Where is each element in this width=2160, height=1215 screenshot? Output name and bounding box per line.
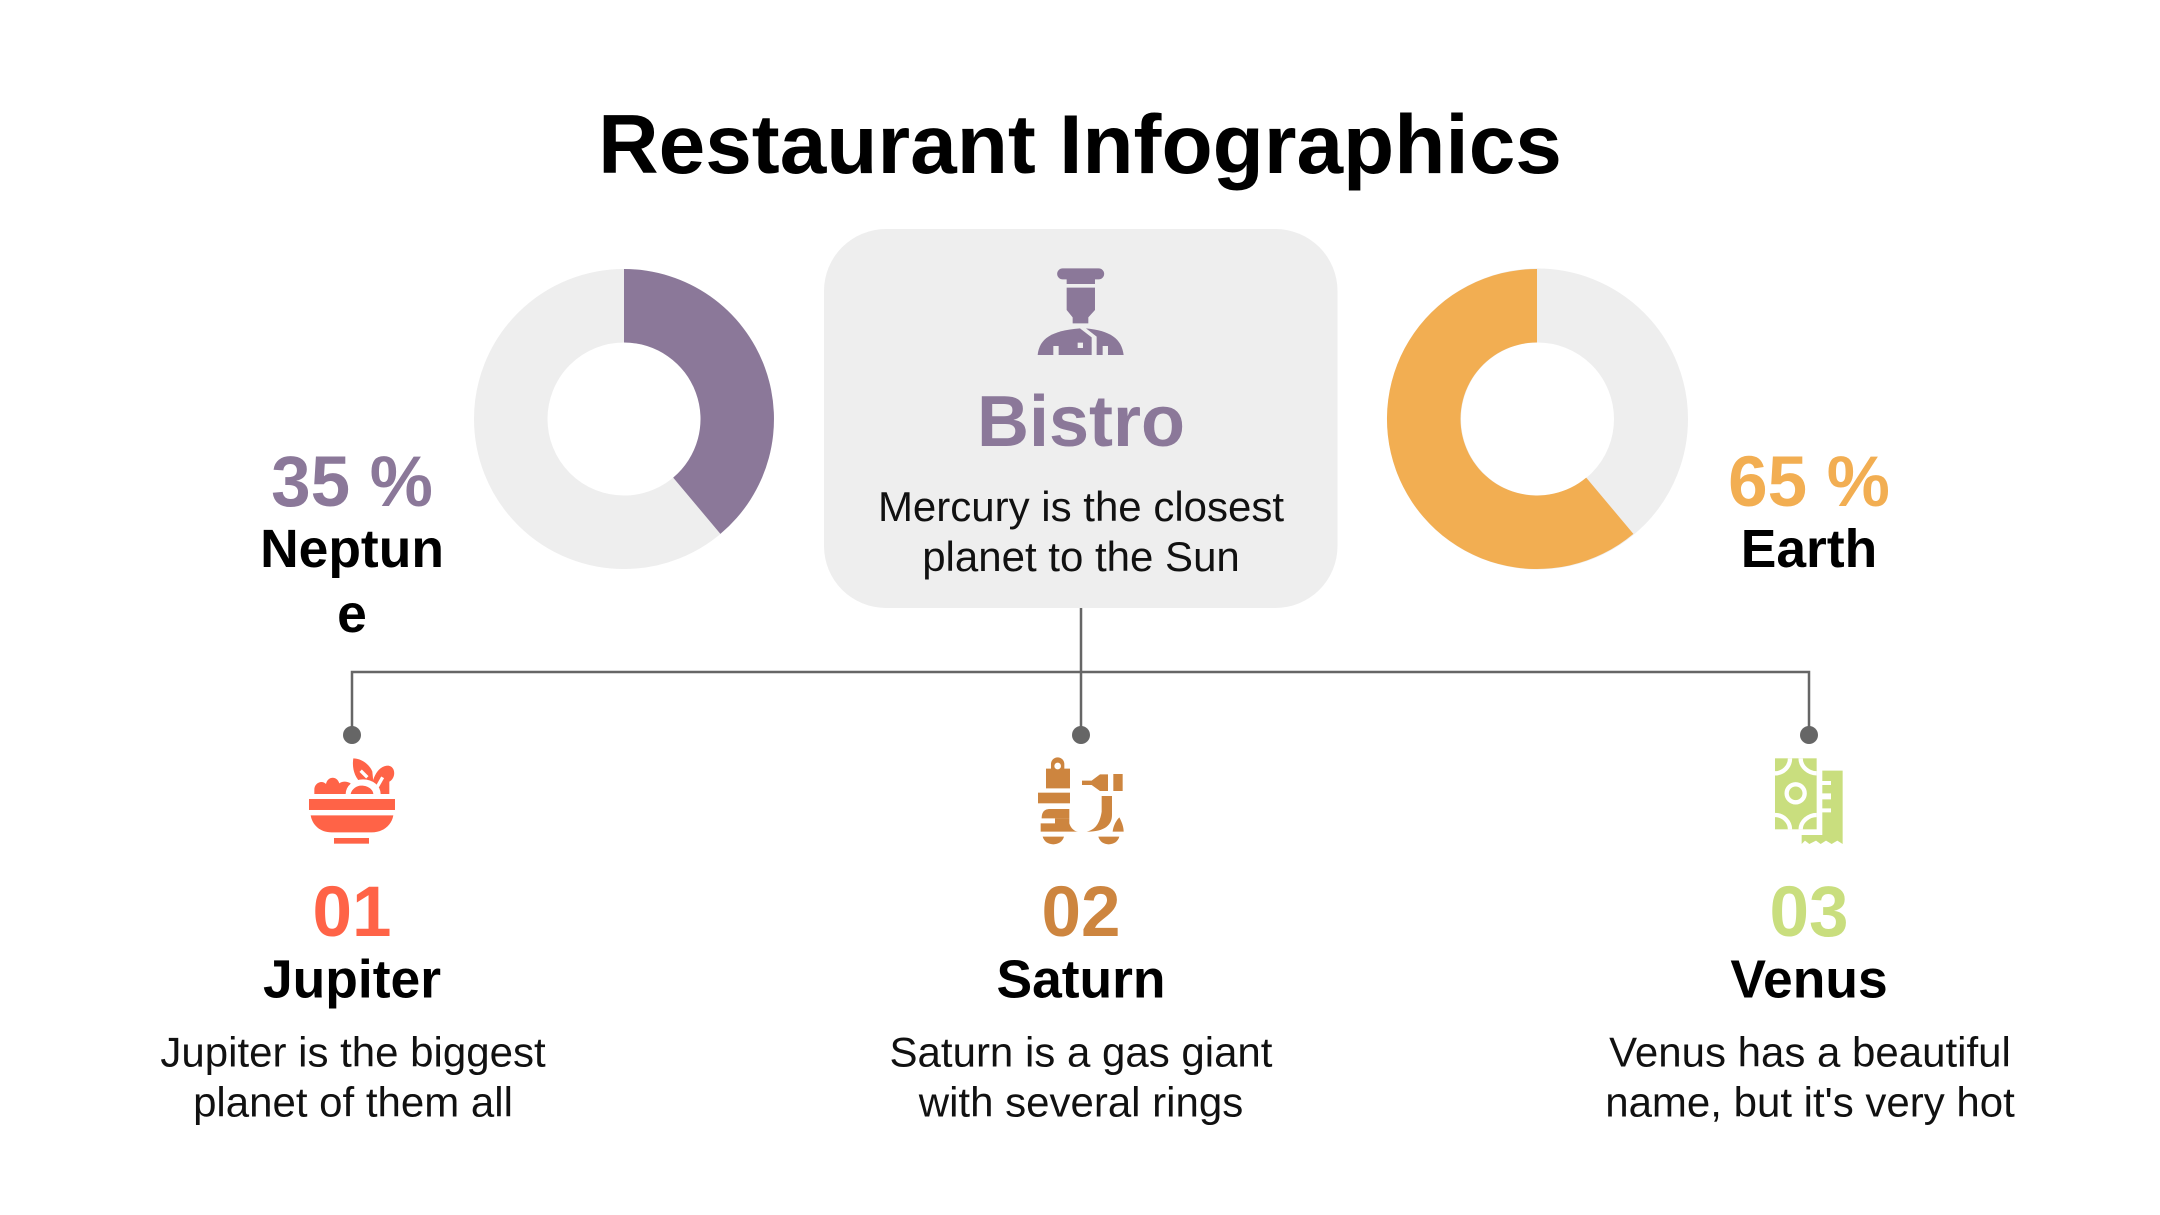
donut chart: Earth 65% [1387,269,1651,569]
stat: Neptune: e [337,585,367,644]
item: Venus [1605,758,2015,1126]
panel: Bistro: planet to the Sun [922,533,1240,580]
number: 03: 03 [1770,873,1848,952]
stat: Neptune: 35 % [271,443,433,522]
item: Saturn: with several rings [918,1078,1243,1126]
heading: Venus: Venus [1730,950,1888,1010]
item: Saturn [890,757,1273,1126]
connector lines [343,607,1818,744]
text: Bistro description: Mercury is the closest [878,483,1284,530]
icon: salad bowl [309,758,395,844]
text: Saturn description: Saturn is a gas giant [890,1028,1273,1076]
text: Jupiter description: Jupiter is the biggest [160,1028,546,1076]
item: Jupiter [160,758,546,1126]
stat: Neptune [260,443,444,644]
stat: Earth: Earth [1741,520,1877,579]
donut chart: Neptune 35% [511,269,774,534]
icon: banknote and receipt [1775,758,1843,844]
title: Restaurant Infographics [598,97,1562,191]
icon: food delivery scooter [1038,757,1124,844]
number: 01: 01 [313,873,391,952]
item: Venus: name, but it's very hot [1605,1078,2015,1126]
heading: Bistro: Bistro [977,382,1185,462]
stat: Earth: 65 % [1728,443,1890,522]
stat: Earth [1728,443,1890,579]
panel: Bistro [824,229,1338,608]
number: 02: 02 [1042,873,1120,952]
text: Venus description: Venus has a beautiful [1609,1028,2011,1076]
stat: Neptune: Neptun [260,520,444,579]
item: Jupiter: planet of them all [193,1078,513,1126]
heading: Jupiter: Jupiter [263,950,441,1010]
heading: Saturn: Saturn [996,950,1166,1010]
icon: chef [1038,268,1124,355]
